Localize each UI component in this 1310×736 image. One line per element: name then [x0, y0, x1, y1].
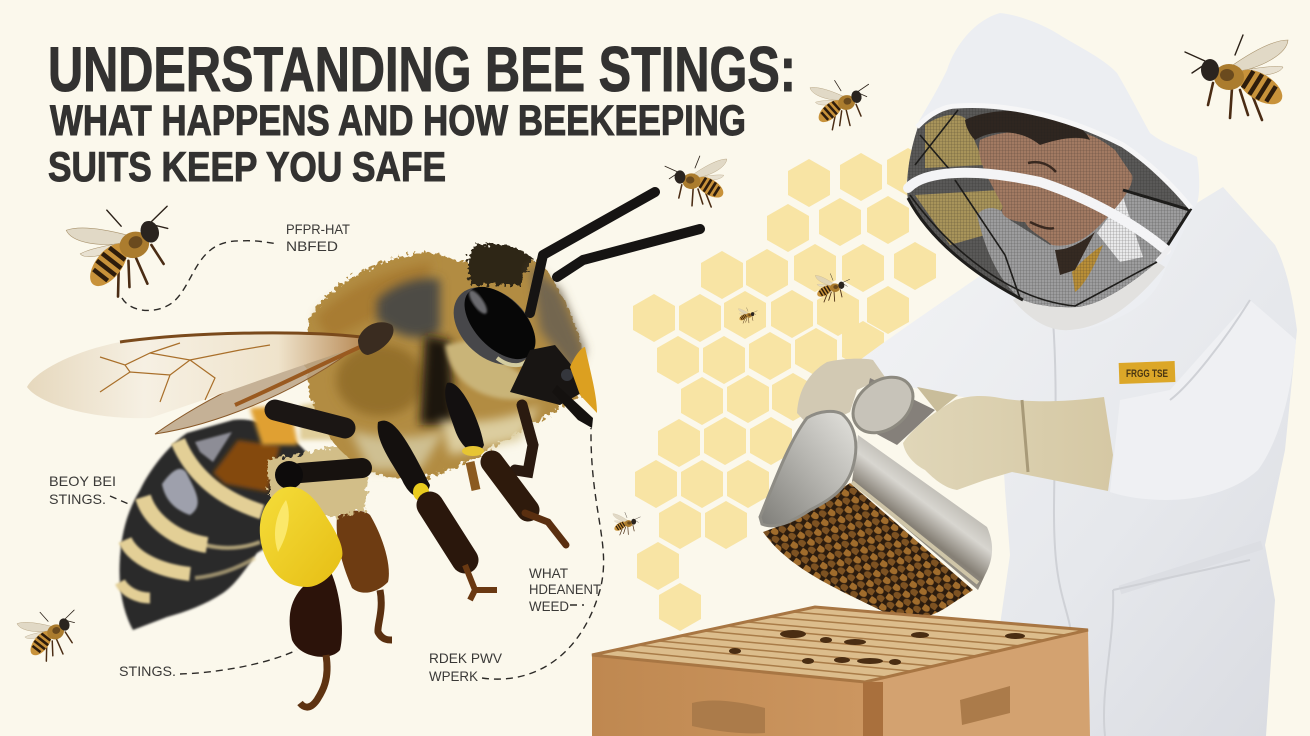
tiny bee [613, 512, 640, 535]
name patch: FRGG TSE [1126, 368, 1168, 380]
callout labels: WHAT [529, 565, 568, 581]
small bee centre [665, 156, 727, 207]
callout labels [49, 221, 601, 684]
suit sleeve [1110, 300, 1296, 500]
smoker can small [842, 366, 935, 445]
callout labels: NBFED [286, 238, 338, 254]
hive corner post [863, 682, 883, 736]
suit folds [1053, 300, 1262, 736]
hive side face [865, 630, 1090, 736]
name patch [1119, 361, 1175, 384]
smoker rim strip [852, 482, 978, 583]
hive rim [592, 607, 1088, 682]
second leg [445, 383, 566, 545]
veil strands [908, 110, 1190, 306]
title: UNDERSTANDING BEE STINGS: [48, 35, 796, 105]
callout labels: WPERK [429, 668, 479, 684]
honeycomb pattern [633, 148, 936, 631]
hair [965, 111, 1090, 145]
middle leg [378, 421, 497, 600]
callout labels: STINGS. [119, 663, 176, 679]
dashed callout lines [110, 241, 604, 679]
abdomen orange fur [250, 405, 298, 445]
callout labels: RDEK PWV [429, 650, 503, 666]
left glove [797, 359, 885, 430]
abdomen [120, 400, 370, 630]
hood opening band [917, 105, 1191, 208]
wing root [358, 322, 393, 355]
hive frames [614, 612, 1066, 677]
bees on hive [729, 630, 1025, 665]
hood [905, 13, 1199, 330]
veil mesh [907, 107, 1190, 307]
smoker cylinder [760, 411, 992, 619]
smoker lid [760, 411, 856, 526]
veil overlay [907, 107, 1190, 307]
abdomen stripes [120, 441, 262, 598]
abdomen shine [162, 432, 232, 515]
front hind leg [275, 461, 362, 489]
callout labels: WEED [529, 598, 569, 614]
swarm of bees [763, 483, 973, 619]
rear brown leg [337, 511, 392, 640]
tiny bee on comb [738, 308, 757, 323]
collar [1013, 262, 1165, 330]
hind wing [155, 342, 358, 434]
veil lower rim [1157, 247, 1170, 262]
veil honeycomb show-through [915, 115, 1003, 245]
title: WHAT HAPPENS AND HOW BEEKEEPING [50, 97, 746, 145]
title [48, 35, 796, 190]
upper leg [275, 410, 345, 428]
brow and mouth [1028, 162, 1056, 229]
main bee [27, 192, 700, 707]
callout labels: PFPR-HAT [286, 221, 350, 237]
hive box [592, 607, 1090, 736]
callout labels: BEOY BEI [49, 473, 116, 489]
tiny bee on comb upper [815, 274, 850, 302]
fur shading [316, 243, 585, 470]
yellow pollen sac [260, 487, 342, 587]
abdomen brown section [213, 440, 280, 492]
lower leg and foot [290, 570, 342, 707]
small bee left [64, 190, 190, 305]
suit body [860, 187, 1297, 736]
hive front face [592, 655, 865, 736]
fore wing [27, 333, 362, 418]
head and eye [438, 271, 597, 428]
callout labels: STINGS. [49, 491, 106, 507]
front thin leg [515, 405, 533, 472]
hive top [592, 607, 1088, 682]
small bee near title [809, 75, 875, 132]
handle holes [692, 686, 1010, 733]
small bee top right [1185, 35, 1288, 120]
shirt [977, 190, 1190, 307]
abdomen cream fur [268, 440, 370, 518]
small bee lower left [16, 601, 87, 666]
right glove [903, 387, 1113, 491]
title: SUITS KEEP YOU SAFE [48, 143, 446, 190]
callout labels: HDEANENT [529, 581, 601, 597]
thorax fur [306, 253, 590, 479]
beekeeper [760, 13, 1297, 736]
veil ring [908, 173, 1166, 250]
antennae [530, 192, 700, 313]
face [979, 132, 1132, 246]
